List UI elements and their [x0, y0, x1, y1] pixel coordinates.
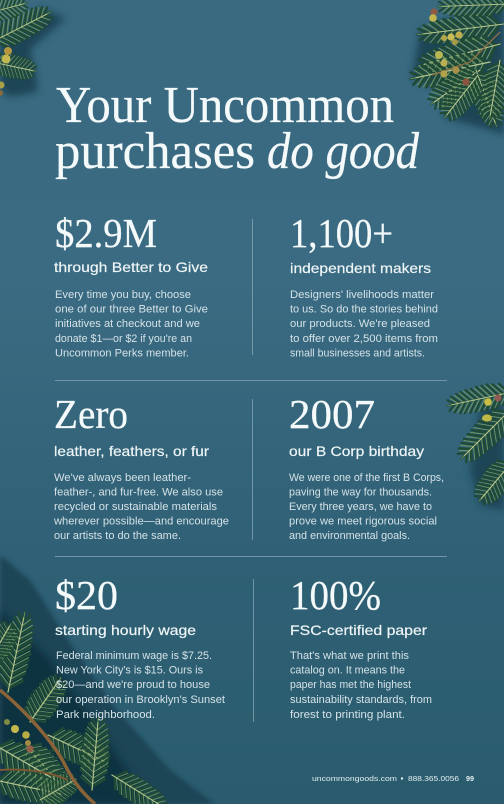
panel: b corp birthday: 2007 — [289, 391, 375, 437]
panel: fsc paper — [290, 572, 432, 721]
panel: independent makers — [290, 210, 438, 360]
greenery: top-right branch — [408, 0, 504, 135]
panel: hourly wage: starting hourly wage — [55, 622, 196, 638]
panel: hourly wage: our operation in Brooklyn's Sunset — [56, 694, 225, 706]
panel: fsc paper: forest to printing plant. — [290, 709, 405, 721]
panel: fsc paper: 100% — [290, 572, 381, 618]
panel: better to give: donate $1—or $2 if you're an — [55, 333, 192, 345]
panel: zero leather: Zero — [54, 391, 128, 437]
panel: independent makers: Designers' livelihoods matter — [290, 289, 434, 301]
panel: zero leather: leather, feathers, or fur — [54, 443, 209, 459]
panel: hourly wage: Park neighborhood. — [56, 709, 155, 721]
panel: hourly wage — [55, 572, 225, 721]
panel: better to give: $2.9M — [55, 210, 157, 256]
panel: zero leather — [53, 391, 229, 542]
panel: better to give: Uncommon Perks member. — [55, 348, 189, 360]
footer: 99 — [466, 774, 474, 783]
panel: independent makers: our products. We're pleased — [290, 318, 430, 330]
panel: independent makers: small businesses and artists. — [290, 348, 425, 360]
panel: b corp birthday: our B Corp birthday — [289, 443, 424, 459]
panel: zero leather: recycled or sustainable materials — [54, 501, 218, 513]
panel: better to give: initiatives at checkout and we — [55, 318, 200, 330]
panel: b corp birthday: paving the way for thousands. — [289, 486, 432, 498]
panel: independent makers: independent makers — [290, 260, 431, 276]
panel: better to give: through Better to Give — [54, 259, 208, 275]
footer — [312, 774, 474, 783]
panel: independent makers: to us. So do the stories behind — [290, 304, 438, 316]
panel: zero leather: wherever possible—and encourage — [53, 516, 229, 528]
title: do good — [267, 123, 420, 180]
panel: fsc paper: sustainability standards, from — [290, 694, 432, 706]
panel: b corp birthday: and environmental goals. — [289, 530, 410, 542]
panel: hourly wage: $20—and we're proud to house — [56, 679, 210, 691]
panel: independent makers: 1,100+ — [290, 210, 393, 256]
panel: b corp birthday — [289, 391, 444, 542]
panel: independent makers: to offer over 2,500 items from — [290, 333, 438, 345]
title: purchases — [55, 123, 255, 180]
greenery: bottom-left cast shadow — [0, 555, 215, 804]
panel: zero leather: feather-, and fur-free. We also use — [54, 486, 223, 498]
panel: fsc paper: paper has met the highest — [290, 679, 411, 691]
panel: better to give — [54, 210, 208, 360]
panel: hourly wage: Federal minimum wage is $7.25. — [56, 650, 212, 662]
panel: better to give: Every time you buy, choose — [55, 289, 191, 301]
footer: uncommongoods.com — [312, 774, 397, 783]
title: Your Uncommon — [56, 77, 394, 134]
panel: zero leather: our artists to do the same. — [54, 530, 181, 542]
panel: zero leather: We've always been leather- — [54, 472, 191, 484]
panel: better to give: one of our three Better to Give — [55, 304, 208, 316]
greenery: top-left branch — [0, 0, 66, 97]
panel: b corp birthday: Every three years, we have to — [289, 501, 432, 513]
panel: b corp birthday: We were one of the first B Corps, — [289, 472, 444, 484]
greenery: bottom-left branch — [0, 610, 172, 804]
panel: hourly wage: $20 — [55, 572, 118, 618]
title — [55, 77, 420, 180]
footer: 888.365.0056 — [408, 774, 459, 783]
panel: fsc paper: catalog on. It means the — [290, 664, 405, 676]
panel: hourly wage: New York City's is $15. Ours is — [56, 664, 203, 676]
panel: fsc paper: That's what we print this — [290, 650, 409, 662]
panel: fsc paper: FSC-certified paper — [290, 622, 427, 638]
greenery: right-middle branch — [445, 380, 504, 511]
panel: b corp birthday: prove we meet rigorous social — [289, 516, 437, 528]
